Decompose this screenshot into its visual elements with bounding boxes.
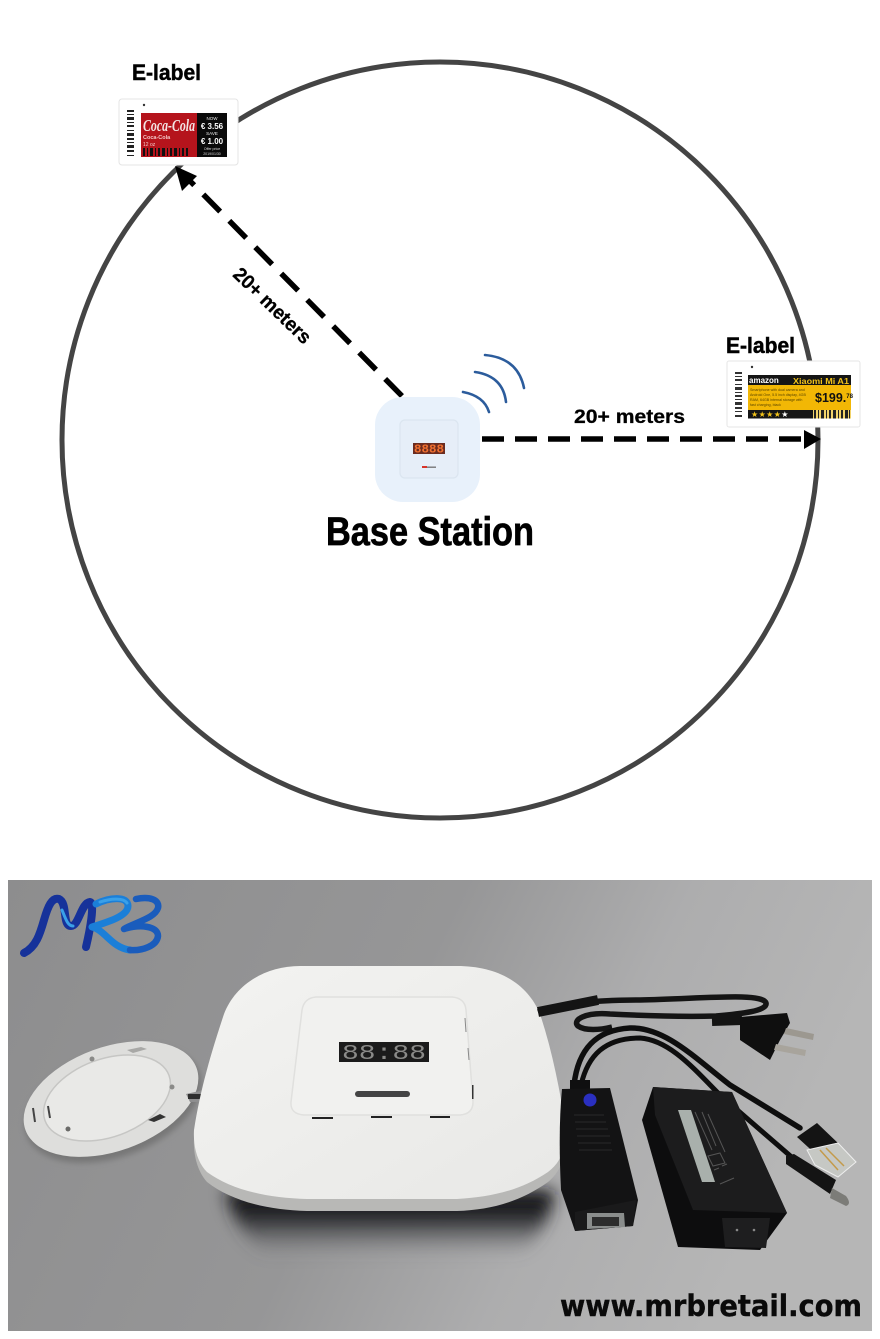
- DC barrel plug: [786, 1154, 849, 1206]
- e-label: Coca-Cola price tag: Coca-Cola: [143, 135, 171, 141]
- icon: wireless signal waves: [463, 355, 524, 412]
- e-label: Coca-Cola price tag: € 3.56: [201, 122, 224, 131]
- PoE splitter cables: [574, 1028, 800, 1160]
- e-label: Coca-Cola price tag: [119, 99, 238, 165]
- base station device: 88:88: [342, 1043, 426, 1066]
- dashed arrow to right e-label: [482, 430, 821, 449]
- e-label: Amazon price tag: $199.: [815, 391, 846, 405]
- e-label: Coca-Cola price tag: 12 oz: [143, 142, 156, 148]
- photo background: [8, 880, 872, 1331]
- power cord and plug: [538, 997, 814, 1060]
- e-label: Coca-Cola price tag: Coca-Cola: [143, 116, 195, 135]
- distance label: horizontal: 20+ meters: [574, 406, 685, 428]
- wall mount plate: [8, 1019, 218, 1185]
- panel: product photo: [8, 880, 872, 1331]
- e-label: Amazon price tag: ★★★★★: [751, 410, 789, 419]
- e-label: Coca-Cola price tag: Offer price: [204, 147, 220, 151]
- e-label caption: upper: E-label: [132, 60, 201, 85]
- base station shadow: [225, 1190, 555, 1255]
- website URL: www.mrbretail.com: [560, 1289, 862, 1323]
- base station device: [194, 966, 566, 1211]
- e-label: Amazon price tag: amazon: [749, 376, 779, 385]
- icon: base station device: 8888: [414, 442, 444, 456]
- e-label: Amazon price tag: [727, 361, 860, 427]
- e-label: Coca-Cola price tag: SAVE: [206, 131, 218, 136]
- e-label: Amazon price tag: Smartphone with dual camera and: [750, 388, 805, 392]
- PoE power adapter: [642, 1087, 787, 1250]
- e-label: Amazon price tag: Xiaomi Mi A1: [793, 376, 849, 386]
- dashed arrow to upper e-label: [175, 166, 402, 396]
- PoE splitter: [560, 1080, 638, 1231]
- e-label: Amazon price tag: Android One, 5.5 inch display, 4GB: [750, 393, 806, 397]
- coverage circle: [62, 62, 818, 818]
- e-label caption: right: E-label: [726, 333, 795, 358]
- e-label: Coca-Cola price tag: 2019/01/30: [203, 152, 221, 156]
- icon: base station device: [375, 397, 480, 502]
- distance label: diagonal: 20+ meters: [228, 263, 316, 349]
- e-label: Coca-Cola price tag: NOW: [206, 116, 218, 121]
- RJ45 plug: [797, 1123, 856, 1177]
- logo: MRB ribbon: [24, 898, 158, 953]
- e-label: Coca-Cola price tag: € 1.00: [201, 137, 224, 146]
- e-label: Amazon price tag: RAM, 64GB internal storage with: [750, 398, 802, 402]
- e-label: Amazon price tag: fast charging, black: [750, 403, 781, 407]
- heading: Base Station: Base Station: [326, 510, 534, 554]
- e-label: Amazon price tag: 78: [846, 394, 854, 400]
